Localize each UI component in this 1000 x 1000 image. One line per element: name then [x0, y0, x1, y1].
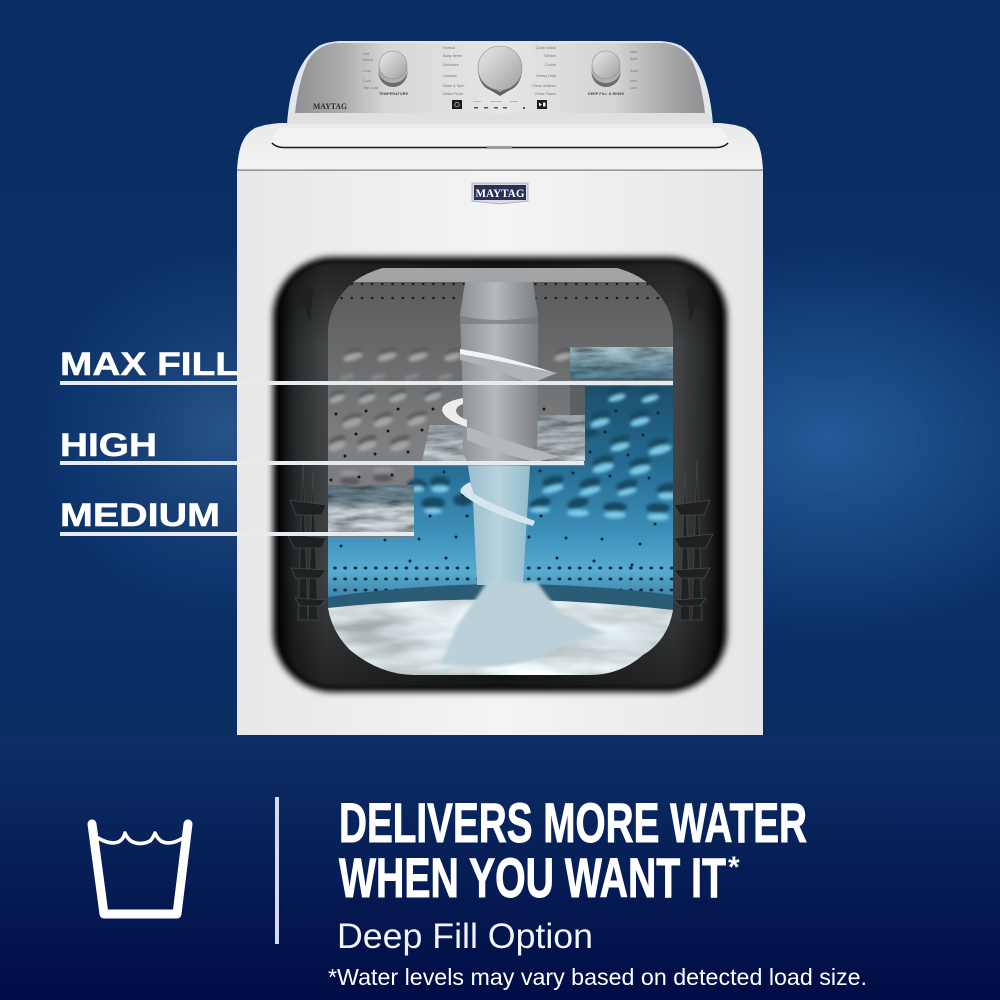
panel labels: Tap Cold — [363, 86, 378, 90]
panel labels: Delicates — [443, 63, 459, 67]
level line: max fill — [60, 346, 673, 385]
bottom band — [0, 735, 1000, 1000]
panel labels: Normal — [443, 46, 455, 50]
water floor — [328, 599, 673, 680]
washer — [237, 41, 763, 735]
panel labels: Hot — [363, 52, 370, 56]
top rim — [340, 268, 665, 282]
agitator: base flare — [440, 582, 606, 667]
cabinet body — [237, 170, 763, 735]
panel labels: Max — [630, 50, 637, 54]
agitator: lower blue — [468, 466, 530, 585]
level line: medium — [60, 497, 414, 536]
helix rib: lower — [460, 482, 535, 526]
subheading: Deep Fill Option — [337, 917, 593, 956]
icon: water basin — [92, 824, 188, 914]
headline — [339, 791, 807, 909]
panel labels: Cold — [363, 79, 371, 83]
panel labels: Clean Washer — [532, 84, 557, 88]
panel labels: Whites — [544, 54, 556, 58]
small gray holes — [330, 408, 546, 482]
panel labels: TEMPERATURE — [379, 92, 409, 96]
left fins — [287, 460, 326, 620]
badge: maytag — [472, 183, 528, 204]
helix rib: upper — [460, 354, 557, 381]
gray dimples — [327, 346, 573, 485]
upper wedges — [296, 285, 313, 322]
drum — [327, 268, 679, 680]
window interior — [281, 264, 719, 685]
panel labels: Low — [630, 86, 637, 90]
label: high: HIGH — [60, 427, 157, 463]
agitator — [440, 282, 606, 667]
panel labels: DEEP FILL & RINSE — [588, 92, 625, 96]
right fins — [674, 460, 713, 620]
water swatch: max fill — [570, 347, 673, 380]
cabinet seam — [237, 170, 763, 171]
agitator: upper gray — [460, 282, 538, 466]
panel labels: Extra Power — [535, 92, 557, 96]
gray strip under max swatch — [570, 385, 585, 463]
control panel — [287, 41, 713, 124]
divider — [275, 797, 279, 944]
tub side walls — [281, 264, 719, 685]
lid — [237, 113, 763, 170]
window shadow — [273, 257, 727, 692]
water swatch: high — [422, 415, 585, 461]
panel labels: Warm — [363, 58, 373, 62]
panel labels: Add — [630, 57, 637, 61]
panel labels: Casuals — [443, 74, 457, 78]
panel labels: Auto — [630, 69, 638, 73]
drum: gray upper — [328, 268, 673, 537]
panel labels: Baby Items — [443, 54, 462, 58]
footnote: *Water levels may vary based on detected load size. — [328, 964, 867, 990]
power button — [452, 100, 462, 109]
panel labels: Quick Wash — [536, 46, 556, 50]
knob: cycle — [478, 46, 522, 96]
panel labels: Med — [630, 79, 637, 83]
label: max fill: MAX FILL — [60, 346, 239, 382]
start button — [537, 100, 547, 109]
panel labels: Drain & Spin — [443, 84, 464, 88]
panel labels: Water Flush — [443, 92, 463, 96]
label: medium: MEDIUM — [60, 497, 220, 533]
level line: high — [60, 427, 584, 465]
blue lower stepped water — [328, 386, 673, 612]
blue small holes — [340, 410, 660, 566]
knob: deep fill — [592, 51, 620, 87]
helix rib: white disc — [442, 398, 467, 427]
helix rib: mid — [467, 427, 560, 462]
panel labels: Cool — [363, 69, 371, 73]
knob: temperature — [378, 51, 408, 87]
maytag panel logo: MAYTAG — [313, 102, 347, 111]
display dots — [473, 101, 525, 109]
panel labels — [363, 46, 638, 96]
water swatch: medium — [328, 485, 414, 532]
headline: DELIVERS MORE WATER — [339, 791, 807, 854]
panel labels: Heavy Duty — [536, 74, 556, 78]
panel labels: Colors — [545, 63, 556, 67]
bottom hole rows — [332, 566, 673, 592]
badge: maytag: MAYTAG — [476, 186, 524, 200]
headline: * — [728, 851, 740, 884]
band above floor — [328, 584, 673, 615]
top hole rows — [340, 283, 660, 300]
headline: WHEN YOU WANT IT — [339, 846, 726, 909]
blue glow dimples — [407, 385, 679, 520]
